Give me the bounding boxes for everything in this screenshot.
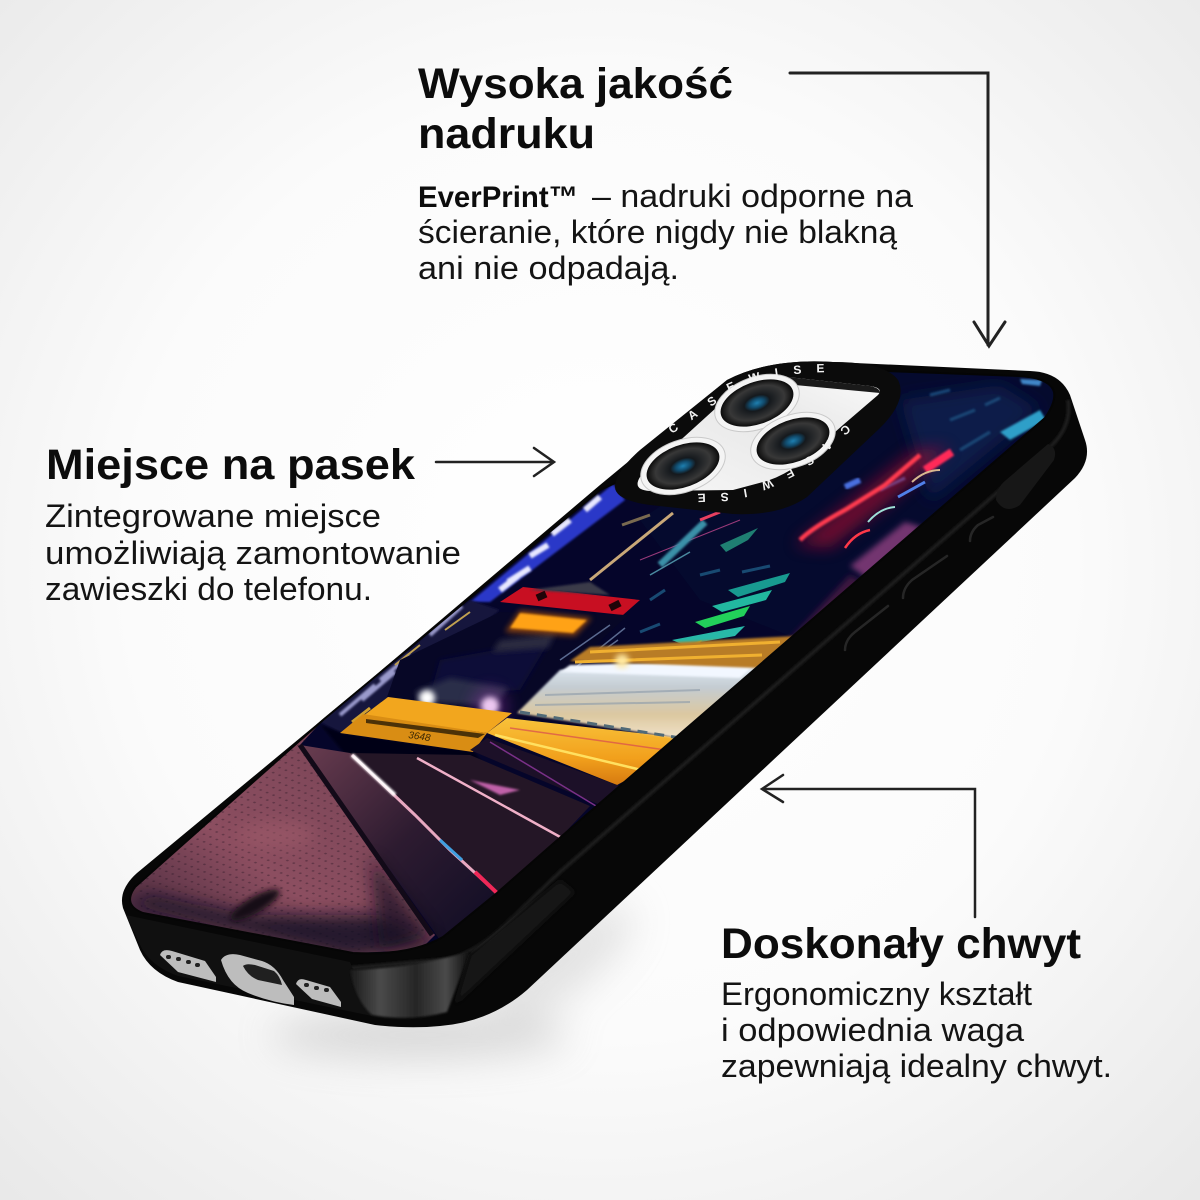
tram rail glare: [351, 754, 484, 883]
phone in case: [122, 361, 1088, 1028]
text: EverPrint description: – nadruki odporne na: [592, 178, 913, 214]
lens top: [707, 364, 807, 442]
text: strap description: umożliwiają zamontowanie: [45, 535, 461, 571]
glossy corner: [350, 952, 470, 1018]
arrow: print quality: [790, 73, 1005, 346]
tram yellow front: [340, 697, 512, 752]
road dark lanes: [470, 738, 620, 805]
brand text lower rim: CASEWISE: [698, 426, 850, 502]
port face: [126, 915, 372, 1016]
bottom left speaker: [160, 950, 216, 982]
case rim highlight: [350, 400, 1069, 968]
text: EverPrint description: EverPrint™: [418, 181, 578, 214]
text: strap description: zawieszki do telefonu.: [45, 571, 372, 607]
pale light trails: [516, 666, 756, 739]
pink wall: [850, 522, 922, 582]
text: strap description: [45, 498, 461, 607]
arrow: strap slot: [436, 448, 554, 476]
lens left: [633, 427, 733, 505]
paving dark edges: [130, 855, 440, 958]
under tram shadow: [322, 726, 480, 760]
heading: Wysoka jakość nadruku: nadruku: [418, 110, 595, 158]
heading: Wysoka jakość nadruku: [418, 60, 733, 158]
lens right: [743, 402, 843, 480]
text: grip description: Ergonomiczny kształt: [721, 976, 1032, 1012]
text: grip description: i odpowiednia waga: [721, 1012, 1024, 1048]
tram windshield: [387, 614, 624, 698]
camera island: [615, 361, 901, 514]
printed photo: [131, 372, 1054, 952]
text: grip description: zapewniają idealny chwyt.: [721, 1048, 1112, 1084]
upper right night sky: [640, 370, 1060, 640]
strap slot: [996, 444, 1055, 509]
text: EverPrint description: [418, 178, 913, 286]
case body: [122, 361, 1087, 1027]
heading: Miejsce na pasek: Miejsce na pasek: [46, 441, 415, 489]
lower side wall sheen: [455, 880, 575, 1005]
green and teal building stripes: [640, 528, 790, 656]
text: grip description: [721, 976, 1112, 1084]
bottom right speaker: [296, 979, 341, 1007]
tram roof: [500, 587, 640, 615]
phone shadow: [270, 886, 649, 1057]
opening inner shadow: [725, 378, 880, 400]
text: EverPrint description: ani nie odpadają.: [418, 250, 679, 286]
heading: Doskonały chwyt: Doskonały chwyt: [721, 920, 1081, 968]
charging port: [221, 954, 294, 1005]
yellow light trail: [487, 718, 674, 785]
paving dots: [136, 740, 424, 950]
building lights top right: [880, 379, 1046, 490]
text: EverPrint description: ścieranie, które nigdy nie blakną: [418, 214, 897, 250]
amber upper trails: [570, 636, 795, 668]
paving: [125, 720, 435, 953]
destination sign: [505, 610, 592, 636]
middle asphalt: [300, 745, 500, 940]
brand text upper rim: CASEWISE: [669, 364, 824, 432]
tram wires: [590, 512, 740, 580]
heading: Wysoka jakość nadruku: Wysoka jakość: [418, 60, 733, 108]
side buttons: [845, 517, 993, 650]
left building lights: [320, 484, 625, 735]
camera opening glass: [638, 378, 880, 491]
tram yellow front: 3648: [408, 730, 432, 744]
text: strap description: Zintegrowane miejsce: [45, 498, 381, 534]
arrow: grip: [762, 775, 975, 917]
neon red sign: [795, 448, 952, 548]
screen edge line: [130, 370, 1054, 953]
tram headlights: [419, 690, 435, 706]
